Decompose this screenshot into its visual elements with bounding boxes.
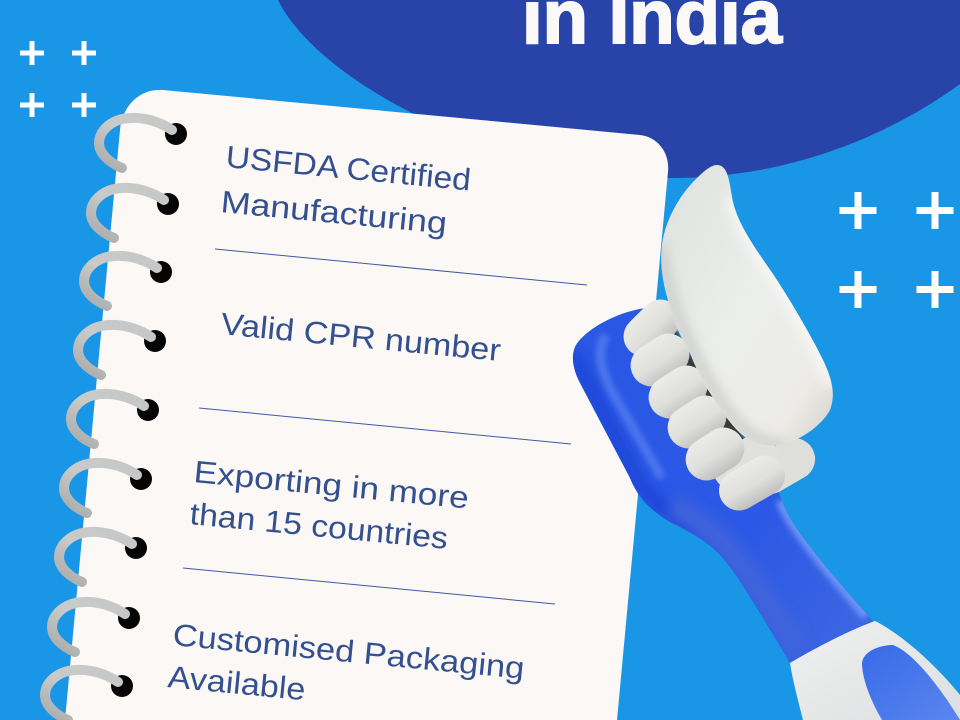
item: Customised Packaging Available: Customised Packaging xyxy=(171,617,526,686)
checklist text and dividers xyxy=(166,139,587,707)
item: Valid CPR number: Valid CPR number xyxy=(219,306,502,368)
plus signs: right xyxy=(840,192,954,308)
handle blue inlay xyxy=(862,645,960,720)
toothpaste xyxy=(661,165,833,445)
notebook page xyxy=(65,90,668,720)
plus signs: top left xyxy=(20,41,96,117)
item: USFDA Certified Manufacturing: USFDA Certified xyxy=(224,139,473,198)
item: Exporting in more than 15 countries: than 15 countries xyxy=(188,496,449,556)
bristles xyxy=(615,291,823,518)
toothbrush xyxy=(572,165,960,720)
item: Customised Packaging Available xyxy=(166,617,526,707)
handle grip xyxy=(790,621,960,720)
item: Customised Packaging Available: Available xyxy=(166,659,307,707)
item: USFDA Certified Manufacturing xyxy=(219,139,473,241)
brush head and neck xyxy=(573,308,873,663)
back bristles xyxy=(741,430,823,502)
item: USFDA Certified Manufacturing: Manufacturing xyxy=(219,184,449,241)
title blob xyxy=(278,0,960,178)
brush shading xyxy=(572,335,868,650)
item: Exporting in more than 15 countries xyxy=(188,454,470,556)
shadow behind bristles xyxy=(660,320,745,450)
spiral rings xyxy=(45,118,187,720)
item: Exporting in more than 15 countries: Exporting in more xyxy=(192,454,470,515)
